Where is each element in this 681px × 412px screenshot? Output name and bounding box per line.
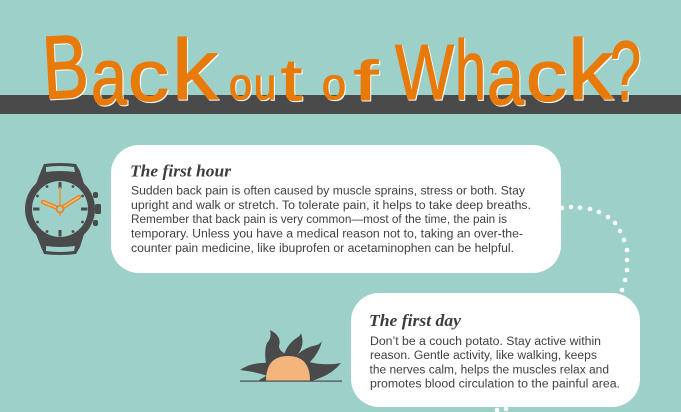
- heading: the first hour: The first hour: [130, 162, 231, 180]
- dotted path: [495, 205, 629, 412]
- text block: the first day: [370, 336, 620, 390]
- title: f: [354, 49, 379, 112]
- title: o: [229, 60, 252, 109]
- text block: the first hour: [131, 186, 531, 255]
- text block: the first hour: counter pain medicine, like ibuprofen or acetaminophen can be helpful.: [131, 243, 514, 255]
- text block: the first day: promotes blood circulation to the painful area.: [370, 378, 620, 390]
- title: c: [526, 37, 567, 117]
- panel: the first hour: [111, 145, 561, 273]
- title: [40, 17, 641, 121]
- title: o: [322, 60, 346, 109]
- title: B: [40, 17, 91, 119]
- title: k: [568, 23, 614, 118]
- icon: watch: [25, 163, 101, 255]
- header bar: [0, 95, 681, 114]
- text block: the first day: the nerves calm, helps the muscles relax and: [370, 364, 609, 376]
- sun disc: [266, 356, 310, 381]
- title: t: [281, 48, 302, 113]
- title: ?: [610, 24, 641, 118]
- title: W: [395, 28, 454, 116]
- text block: the first day: reason. Gentle activity, like walking, keeps: [370, 350, 597, 362]
- title: a: [487, 32, 524, 121]
- title: u: [254, 60, 276, 109]
- heading: the first day: The first day: [369, 311, 461, 330]
- text block: the first hour: temporary. Unless you have a medical reason not to, taking an over-the-: [131, 228, 523, 240]
- title: k: [172, 23, 219, 118]
- text block: the first hour: upright and walk or stretch. To tolerate pain, it helps to take deep breaths.: [131, 200, 531, 212]
- icon: sun: [240, 330, 342, 382]
- title: c: [128, 37, 169, 117]
- title: a: [91, 32, 127, 121]
- text block: the first hour: Remember that back pain is very common—most of the time, the pain is: [131, 214, 507, 226]
- text block: the first day: Don’t be a couch potato. Stay active within: [370, 336, 601, 348]
- title: h: [455, 23, 486, 117]
- text block: the first hour: Sudden back pain is often caused by muscle sprains, stress or both. Stay: [131, 186, 525, 198]
- panel: the first day: [351, 293, 640, 407]
